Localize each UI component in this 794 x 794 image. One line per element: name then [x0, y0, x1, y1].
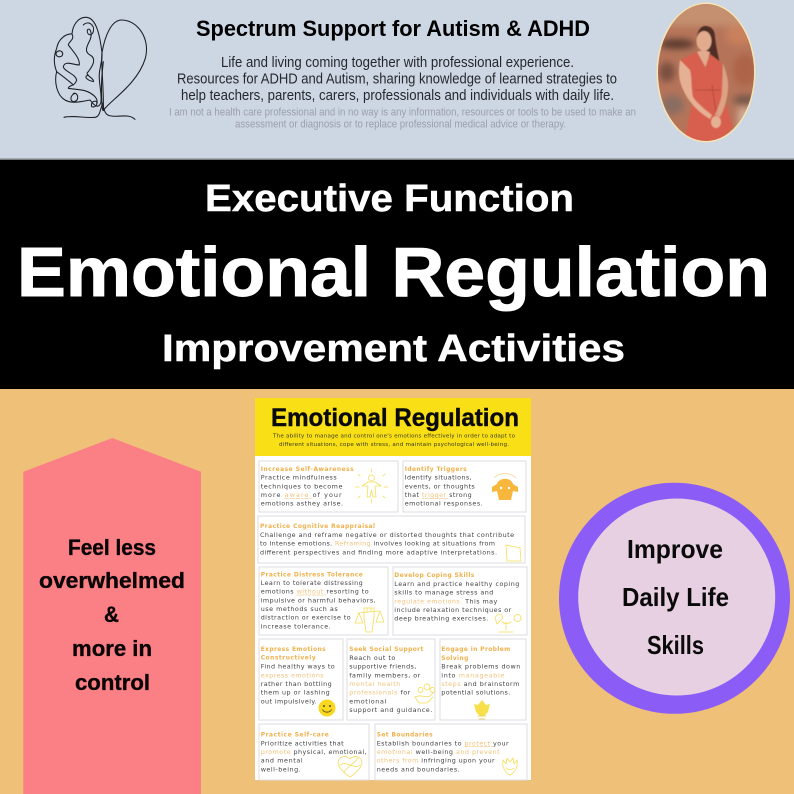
card: practice cognitive reappraisal: Practice Cognitive Reappraisal: [260, 524, 375, 530]
circle text: [622, 534, 729, 660]
card: develop coping skills: deep breathing exercises.: [394, 615, 488, 623]
card: seek social support: [347, 639, 435, 720]
arrow text: &: [104, 602, 119, 627]
header panel: [0, 0, 794, 160]
card: seek social support: emotional: [349, 697, 387, 705]
card: practice cognitive reappraisal: different perspectives and finding more adaptive interpretations.: [260, 548, 497, 556]
arrow text: more in: [72, 636, 152, 661]
card: express emotions constructively: express emotions: [261, 671, 324, 679]
disclaimer: [169, 106, 636, 130]
arrow text: control: [75, 670, 150, 695]
icon: light bulbs: [474, 700, 490, 719]
card: engage in problem solving: potential solutions.: [441, 689, 510, 697]
card: engage in problem solving: steps and brainstorm: [441, 680, 519, 688]
card: identify triggers: Identify Triggers: [405, 467, 467, 473]
title: Improvement Activities: Improvement Activities: [162, 328, 625, 370]
card: seek social support: Seek Social Support: [349, 647, 423, 653]
card: express emotions constructively: rather than bottling: [261, 680, 332, 688]
card: set boundaries: [375, 724, 527, 780]
card: develop coping skills: regulate emotions. This may: [394, 597, 498, 605]
card: seek social support: support and guidance.: [349, 706, 432, 714]
card: practice distress tolerance: distraction or exercise to: [261, 614, 351, 622]
card: engage in problem solving: Break problems down: [441, 663, 520, 671]
card: express emotions constructively: [259, 639, 343, 720]
card: identify triggers: that trigger strong: [405, 491, 472, 499]
card: practice distress tolerance: impulsive or harmful behaviors,: [261, 596, 376, 604]
portrait photo: [655, 0, 760, 145]
circle panel: improve daily life skills: [559, 483, 790, 714]
card: engage in problem solving: [440, 639, 526, 720]
card: practice cognitive reappraisal: [258, 516, 525, 563]
card: practice self-care: Practice Self-care: [261, 733, 329, 739]
card: engage in problem solving: into manageable: [441, 671, 504, 679]
icon: hand with flower: [415, 684, 435, 703]
circle text: Skills: [647, 630, 704, 660]
icon: frame: [506, 545, 521, 561]
icon: smiley: [318, 700, 336, 716]
card: practice cognitive reappraisal: to intense emotions. Reframing involves looking at situations from: [260, 540, 495, 548]
icon: head with hands: [492, 474, 518, 500]
title: Emotional Regulation: Emotional Regulation: [17, 233, 770, 311]
card: practice self-care: [259, 724, 369, 780]
arrow text: Feel less: [68, 535, 156, 560]
orange lower background: [0, 389, 794, 794]
card: seek social support: Reach out to: [349, 654, 395, 662]
card: set boundaries: emotional well-being and prevent: [377, 748, 500, 756]
icon: balance: [495, 614, 521, 632]
poster header: The ability to manage and control one's emotions effectively in order to adapt to: [272, 434, 516, 440]
intro text: help teachers, parents, carers, professionals and individuals with daily life.: [181, 88, 614, 104]
card: seek social support: professionals for: [349, 689, 411, 697]
card: express emotions constructively: Express Emotions: [261, 647, 326, 653]
card: engage in problem solving: Solving: [441, 656, 468, 662]
card: identify triggers: [403, 461, 526, 512]
card: express emotions constructively: out impulsively.: [261, 697, 317, 705]
card: seek social support: supportive friends,: [349, 663, 416, 671]
intro text: [177, 55, 617, 104]
card: develop coping skills: Develop Coping Skills: [394, 573, 475, 579]
card: set boundaries: Establish boundaries to protect your: [377, 739, 509, 747]
card: identify triggers: events, or thoughts: [405, 482, 475, 490]
icon: heart knot: [338, 757, 362, 777]
card: set boundaries: others from infringing upon your: [377, 757, 495, 765]
card: practice cognitive reappraisal: Challenge and reframe negative or distorted thoughts that contribute: [260, 531, 514, 539]
card: increase self-awareness: [259, 461, 398, 512]
icon: protective hands: [503, 758, 517, 775]
card: practice distress tolerance: Practice Distress Tolerance: [261, 572, 363, 578]
card: increase self-awareness: techniques to become: [261, 482, 342, 490]
card: express emotions constructively: Constructively: [261, 656, 316, 662]
black title band: [0, 160, 794, 389]
icon: radiant person: [355, 469, 388, 503]
card: practice distress tolerance: emotions without resorting to: [261, 588, 369, 596]
card: increase self-awareness: Increase Self-Awareness: [261, 467, 354, 473]
card: practice distress tolerance: increase tolerance.: [261, 622, 331, 630]
disclaimer: I am not a health care professional and in no way is any information, resources or tools to be used to make an: [169, 106, 636, 118]
card: practice self-care: promote physical, emotional,: [261, 748, 367, 756]
icon: brain and heart line drawing: [54, 17, 147, 119]
card: increase self-awareness: Practice mindfulness: [261, 474, 337, 482]
card: identify triggers: emotional responses.: [405, 500, 483, 508]
card: practice self-care: Prioritize activities that: [261, 739, 344, 747]
circle text: Daily Life: [622, 582, 729, 612]
intro text: Life and living coming together with professional experience.: [221, 55, 574, 71]
poster header: different situations, cope with stress, and maintain psychological well-being.: [279, 442, 509, 448]
poster header: [255, 398, 531, 456]
card: seek social support: family members, or: [349, 671, 421, 679]
card: practice distress tolerance: use methods such as: [261, 605, 338, 613]
circle text: Improve: [627, 534, 723, 564]
header title: Spectrum Support for Autism & ADHD: [196, 16, 590, 41]
card: practice distress tolerance: [259, 567, 388, 635]
card: set boundaries: Set Boundaries: [377, 733, 433, 739]
card: develop coping skills: [393, 567, 527, 635]
card: express emotions constructively: them up or lashing: [261, 689, 330, 697]
card: practice self-care: well-being.: [261, 765, 301, 773]
icon: fist and scales: [355, 608, 384, 632]
arrow text: overwhelmed: [39, 568, 185, 593]
card: develop coping skills: skills to manage stress and: [394, 589, 493, 597]
disclaimer: assessment or diagnosis or to replace professional medical advice or therapy.: [235, 118, 566, 130]
poster header: Emotional Regulation: [271, 404, 519, 432]
title: Executive Function: Executive Function: [205, 178, 574, 220]
poster: emotional regulation: [255, 398, 531, 780]
card: develop coping skills: Learn and practice healthy coping: [394, 580, 519, 588]
card: increase self-awareness: more aware of your: [261, 491, 342, 499]
arrow text: [39, 535, 185, 695]
card: seek social support: mental health: [349, 680, 400, 688]
card: increase self-awareness: emotions asthey arise.: [261, 500, 343, 508]
card: engage in problem solving: Engage in Problem: [441, 647, 510, 653]
card: set boundaries: needs and boundaries.: [377, 765, 460, 773]
card: practice distress tolerance: Learn to tolerate distressing: [261, 579, 363, 587]
card: express emotions constructively: Find healthy ways to: [261, 663, 335, 671]
arrow panel: feel less overwhelmed: [23, 438, 201, 794]
intro text: Resources for ADHD and Autism, sharing knowledge of learned strategies to: [177, 72, 617, 88]
card: practice self-care: and mental: [261, 757, 303, 765]
card: develop coping skills: include relaxation techniques or: [394, 606, 512, 614]
card: identify triggers: Identify situations,: [405, 474, 472, 482]
